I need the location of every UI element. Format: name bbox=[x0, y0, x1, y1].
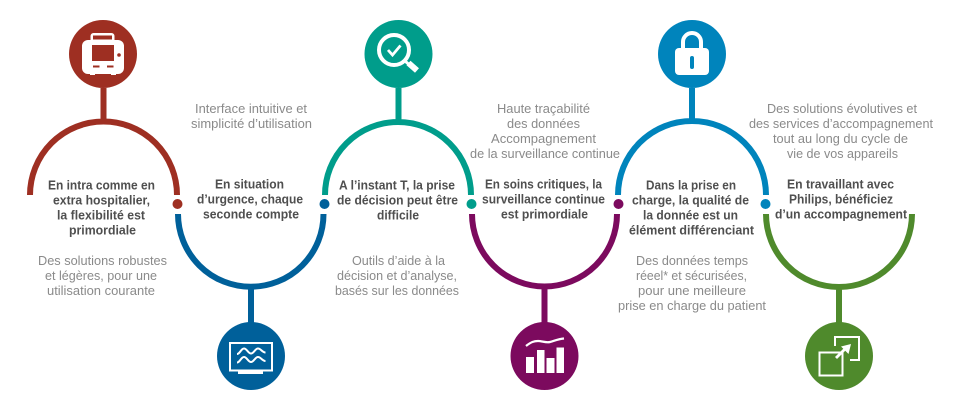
step 5 heading: Dans la prise en bbox=[646, 178, 736, 192]
step 5 heading bbox=[629, 178, 755, 238]
step 5 description: prise en charge du patient bbox=[618, 299, 766, 313]
step 5 description: pour une meilleure bbox=[638, 284, 746, 298]
icon: padlock bbox=[658, 20, 726, 88]
step 6 description: des services d’accompagnement bbox=[749, 117, 933, 131]
step 2 description: simplicité d’utilisation bbox=[191, 117, 312, 131]
icon: expand squares bbox=[805, 322, 873, 390]
connector dot 2 bbox=[320, 199, 330, 209]
step 6: green arc with expand icon bbox=[766, 214, 912, 390]
step 3 description: décision et d’analyse, bbox=[337, 269, 457, 283]
step 1 heading: extra hospitalier, bbox=[53, 194, 150, 208]
step 1 description: utilisation courante bbox=[47, 284, 155, 298]
step 5 heading: charge, la qualité de bbox=[632, 194, 749, 208]
step 1 heading: En intra comme en bbox=[48, 178, 155, 192]
step 3 description bbox=[335, 254, 459, 298]
step 4 heading: En soins critiques, la bbox=[485, 178, 603, 192]
step 1 heading: primordiale bbox=[69, 224, 136, 238]
step 3 description: basés sur les données bbox=[335, 284, 459, 298]
step 1 heading bbox=[48, 178, 155, 238]
step 4 description: Haute traçabilité bbox=[497, 102, 590, 116]
step 3 heading: difficile bbox=[377, 208, 419, 222]
step 2 heading: seconde compte bbox=[203, 208, 299, 222]
step 2 heading: d’urgence, chaque bbox=[197, 192, 303, 206]
step 5 heading: la donnée est un bbox=[643, 208, 738, 222]
step 5 description bbox=[618, 254, 766, 313]
step 2: blue arc with monitor icon bbox=[178, 214, 324, 390]
step 2 heading bbox=[197, 178, 303, 222]
arc and stem bbox=[325, 88, 471, 195]
step 6 heading: d’un accompagnement bbox=[775, 208, 908, 222]
step 6 description bbox=[749, 102, 933, 161]
step 1 description: Des solutions robustes bbox=[38, 254, 167, 268]
step 5 description: réeel* et sécurisées, bbox=[636, 269, 747, 283]
step 5: light blue arc with padlock icon bbox=[618, 20, 766, 195]
step 4 description: Accompagnement bbox=[491, 132, 597, 146]
step 3 description: Outils d’aide à la bbox=[352, 254, 445, 268]
step 4 description: des données bbox=[507, 117, 580, 131]
step 1 description: et légères, pour une bbox=[45, 269, 157, 283]
step 1 heading: la flexibilité est bbox=[57, 208, 146, 222]
step 4 description bbox=[470, 102, 620, 161]
step 3 heading: A l’instant T, la prise bbox=[339, 178, 455, 192]
step 6 heading: En travaillant avec bbox=[787, 178, 894, 192]
step 6 description: vie de vos appareils bbox=[787, 147, 898, 161]
step 3 heading: de décision peut être bbox=[337, 194, 458, 208]
step 6 description: Des solutions évolutives et bbox=[767, 102, 917, 116]
arc and stem bbox=[766, 214, 912, 325]
arc and stem bbox=[30, 88, 177, 195]
step 6 heading bbox=[775, 178, 908, 222]
step 4 heading: est primordiale bbox=[501, 208, 588, 222]
step 6 heading: Philips, bénéficiez bbox=[789, 192, 893, 206]
connector dot 3 bbox=[466, 199, 476, 209]
step 3 heading bbox=[337, 178, 458, 222]
connector dot 5 bbox=[760, 199, 770, 209]
icon: defibrillator bbox=[69, 20, 137, 88]
step 2 description bbox=[191, 102, 312, 131]
step 1: red arc with defibrillator icon bbox=[30, 20, 177, 195]
step 1 description bbox=[38, 254, 167, 298]
connector dot 4 bbox=[614, 199, 624, 209]
step 5 heading: élément différenciant bbox=[629, 224, 755, 238]
step 2 heading: En situation bbox=[215, 178, 284, 192]
arc and stem bbox=[472, 214, 617, 325]
step 4: purple arc with chart icon bbox=[472, 214, 617, 390]
icon: monitor bbox=[217, 322, 285, 390]
connector dot 1 bbox=[172, 199, 182, 209]
icon: bar chart bbox=[510, 322, 578, 390]
step 3: teal arc with magnifier icon bbox=[325, 20, 471, 195]
step 4 heading bbox=[482, 178, 605, 222]
arc and stem bbox=[618, 88, 766, 195]
step 5 description: Des données temps bbox=[636, 254, 748, 268]
arc and stem bbox=[178, 214, 324, 325]
step 2 description: Interface intuitive et bbox=[195, 102, 308, 116]
step 6 description: tout au long du cycle de bbox=[773, 132, 908, 146]
step 4 heading: surveillance continue bbox=[482, 192, 605, 206]
step 4 description: de la surveillance continue bbox=[470, 147, 620, 161]
icon: magnifier bbox=[364, 20, 432, 88]
